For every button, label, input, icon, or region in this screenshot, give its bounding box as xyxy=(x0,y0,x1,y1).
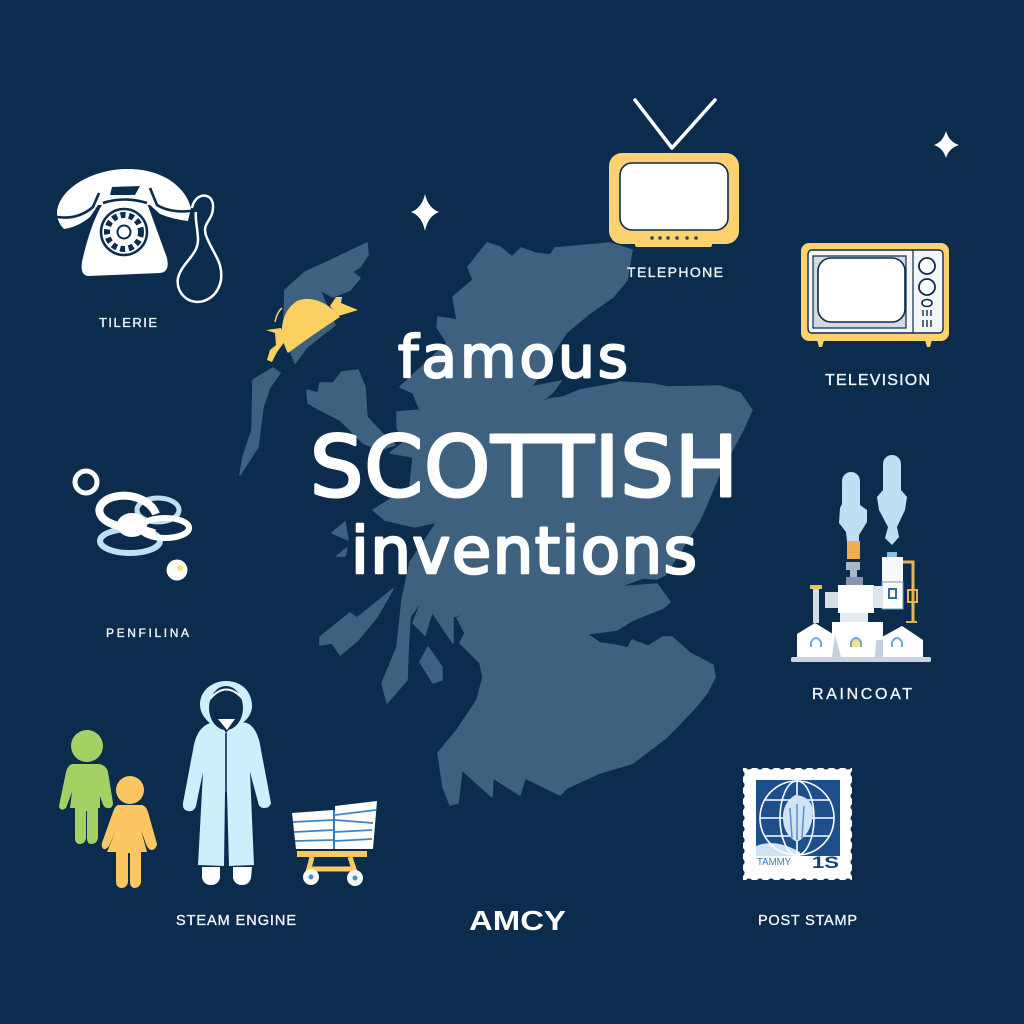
left smoke plume xyxy=(839,472,867,541)
title line 3: inventions xyxy=(351,515,697,589)
icon: steam machine factory xyxy=(791,455,931,662)
icon: yellow bird on island xyxy=(266,297,358,362)
label: penicillin: PENFILINA xyxy=(106,626,189,640)
label: brand name: AMCY xyxy=(469,905,566,936)
icon: penicillin rings xyxy=(75,471,189,580)
label: steam engine: STEAM ENGINE xyxy=(176,913,296,929)
title line 1: famous xyxy=(398,323,628,391)
star right xyxy=(934,131,959,158)
factory buildings xyxy=(832,622,883,657)
stamp value: 1S xyxy=(812,853,839,872)
label: raincoat: RAINCOAT xyxy=(812,686,912,703)
label: post stamp: POST STAMP xyxy=(758,913,857,929)
icon: loaded cart xyxy=(292,801,377,886)
map: small islets xyxy=(332,522,348,556)
icon: postage stamp xyxy=(741,766,854,882)
icon: telephone cord xyxy=(178,196,221,302)
icon: antenna television xyxy=(609,100,739,247)
title line 2: SCOTTISH xyxy=(310,418,738,516)
icon: retro television xyxy=(801,243,949,347)
icon: person in raincoat xyxy=(183,681,271,885)
map: Uist xyxy=(240,368,280,475)
icon: orange figure xyxy=(102,776,157,888)
label: telephone: TELEPHONE xyxy=(627,264,723,280)
star left xyxy=(411,194,439,231)
icon: green figure xyxy=(59,730,113,844)
label: telephone left: TILERIE xyxy=(99,315,157,330)
title xyxy=(310,323,738,589)
map of Scotland xyxy=(240,243,752,805)
map: Arran xyxy=(420,647,442,683)
map: Islay xyxy=(320,589,393,655)
stamp caption: TAMMY xyxy=(757,857,791,868)
map: mainland xyxy=(373,243,752,805)
map: Lewis xyxy=(284,243,368,363)
icon: rotary telephone xyxy=(57,169,221,302)
right smoke plume xyxy=(877,455,907,545)
label: television: TELEVISION xyxy=(825,372,930,389)
map: Isle of Skye xyxy=(307,370,395,450)
